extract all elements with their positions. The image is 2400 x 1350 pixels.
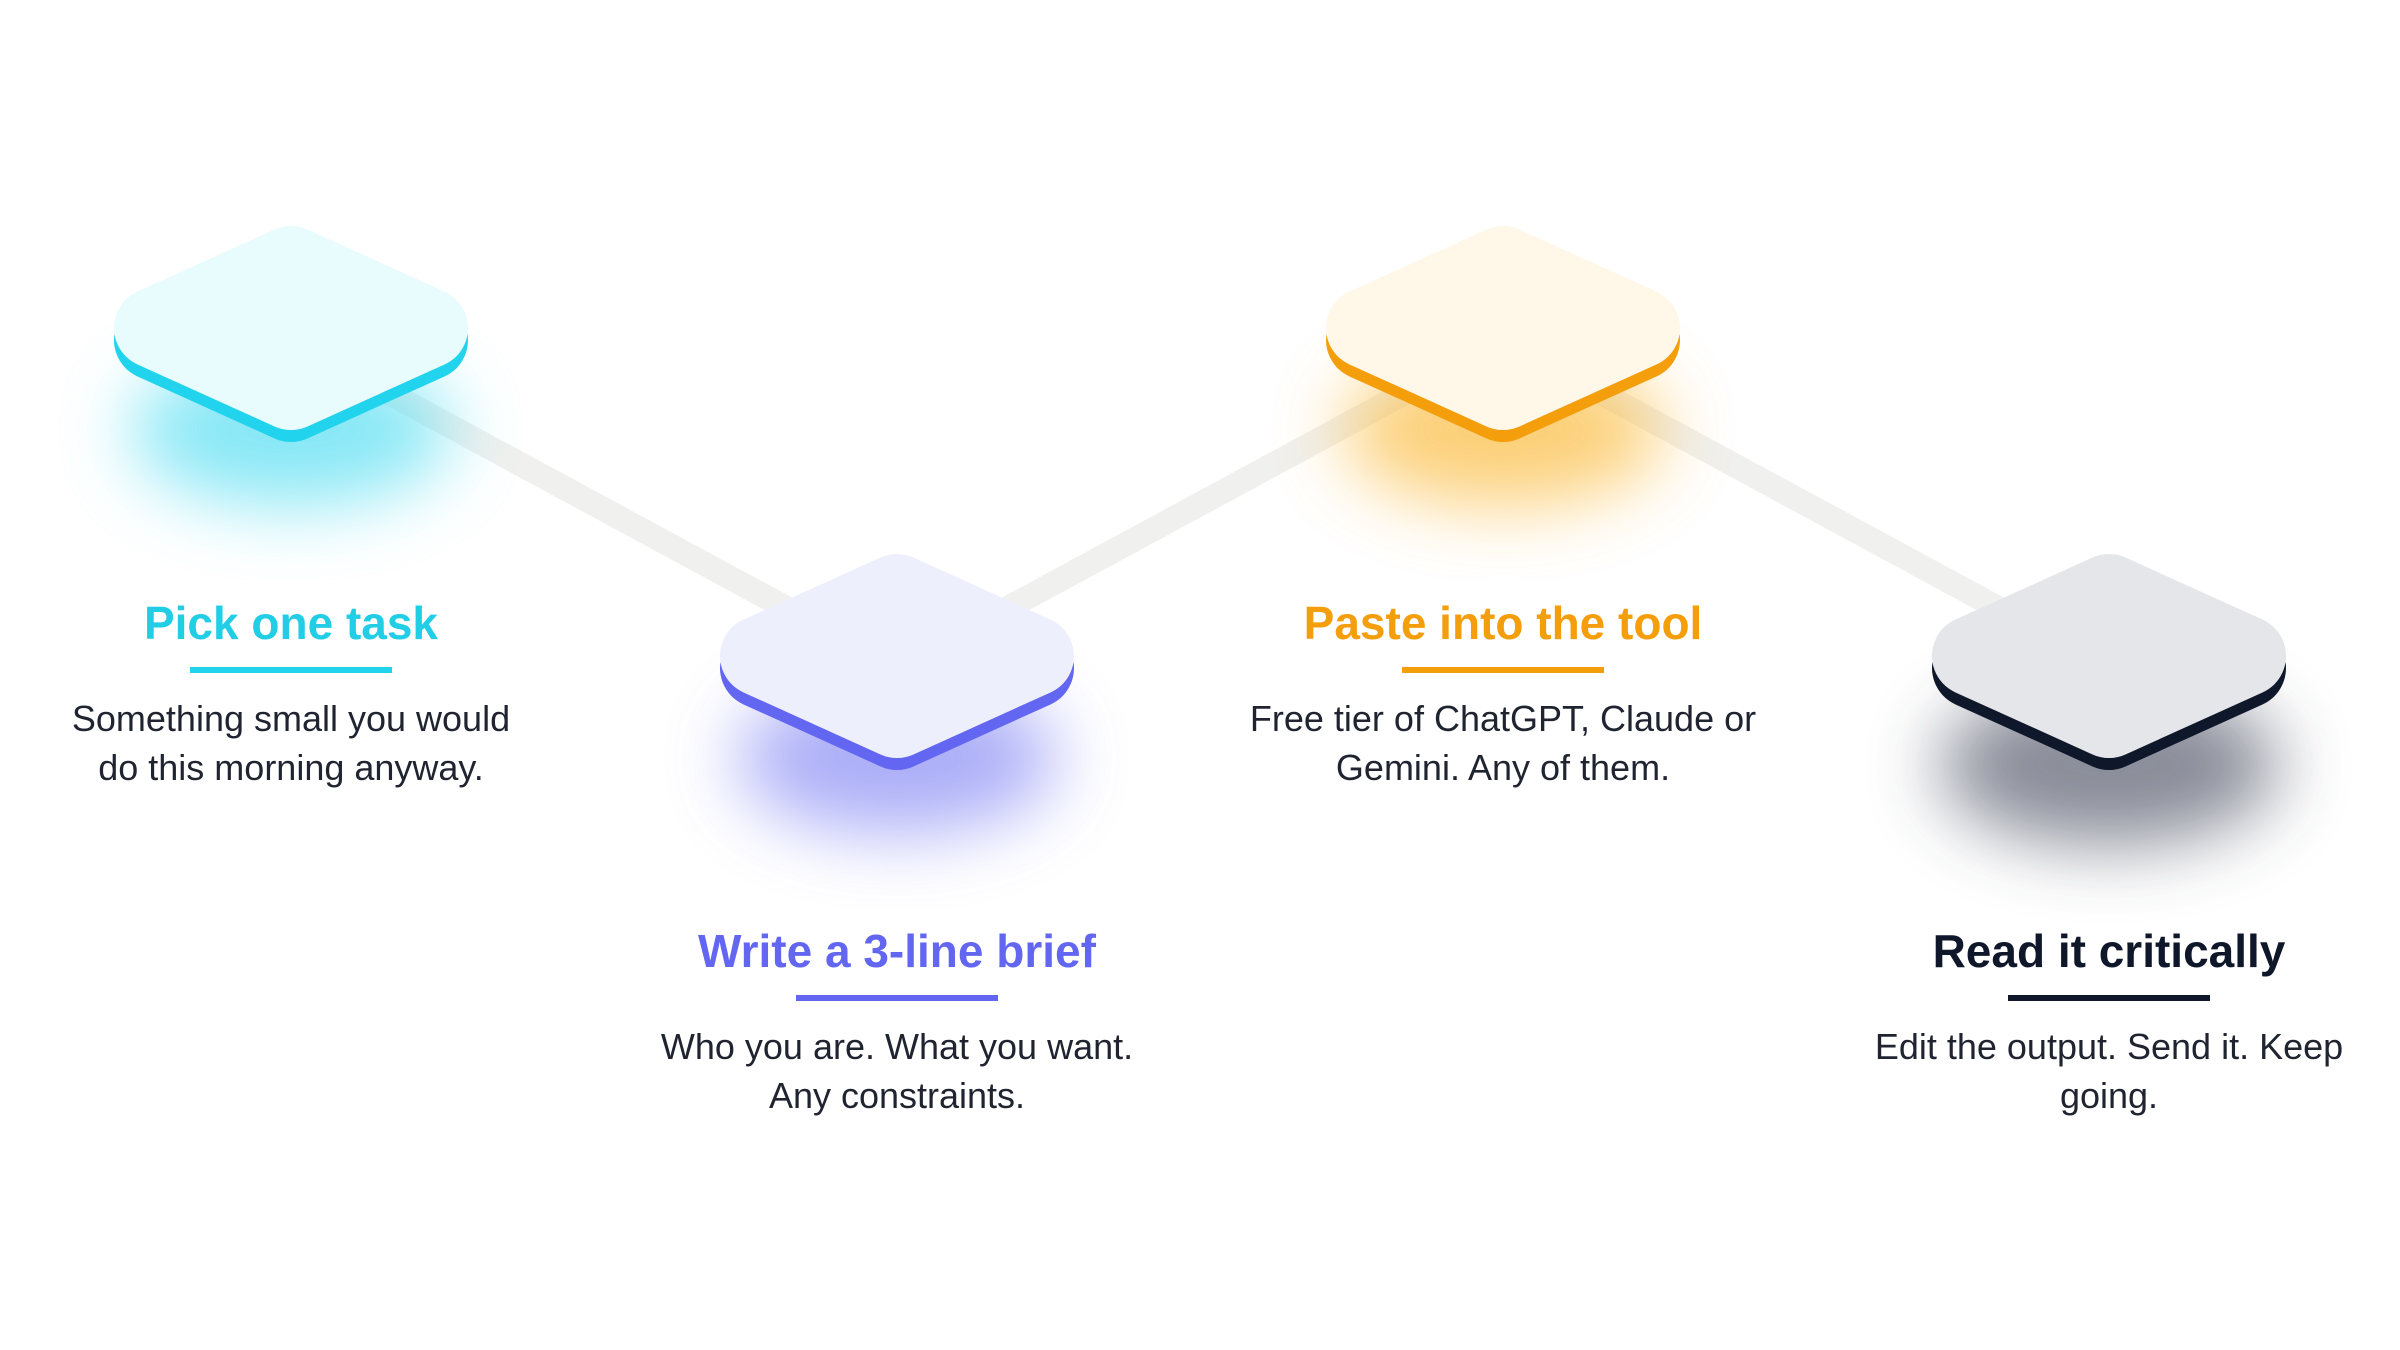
node 2: write a brief [737, 594, 1057, 833]
step 2 text: Write a 3-line brief [698, 925, 1097, 977]
connector lines [291, 340, 2109, 668]
step 3 text: Paste into the tool [1304, 597, 1702, 649]
node 4: read critically [1939, 594, 2279, 845]
step 1 text: do this morning anyway. [98, 747, 484, 788]
step 4 text: going. [2060, 1075, 2158, 1116]
node 3: paste into tool [1343, 266, 1663, 505]
step 1 text [72, 597, 510, 788]
step 3 text: Gemini. Any of them. [1336, 747, 1670, 788]
step 3 text: Free tier of ChatGPT, Claude or [1250, 698, 1756, 739]
step 3 text [1250, 597, 1756, 788]
step 2 text: Any constraints. [769, 1075, 1025, 1116]
step 1 text: Something small you would [72, 698, 510, 739]
step 2 text [661, 925, 1133, 1116]
step 2 text: Who you are. What you want. [661, 1026, 1133, 1067]
step 1 text: Pick one task [144, 597, 438, 649]
step 4 text: Read it critically [1933, 925, 2286, 977]
step 4 text [1875, 925, 2343, 1116]
step 4 text: Edit the output. Send it. Keep [1875, 1026, 2343, 1067]
node 1: pick one task [131, 266, 451, 505]
